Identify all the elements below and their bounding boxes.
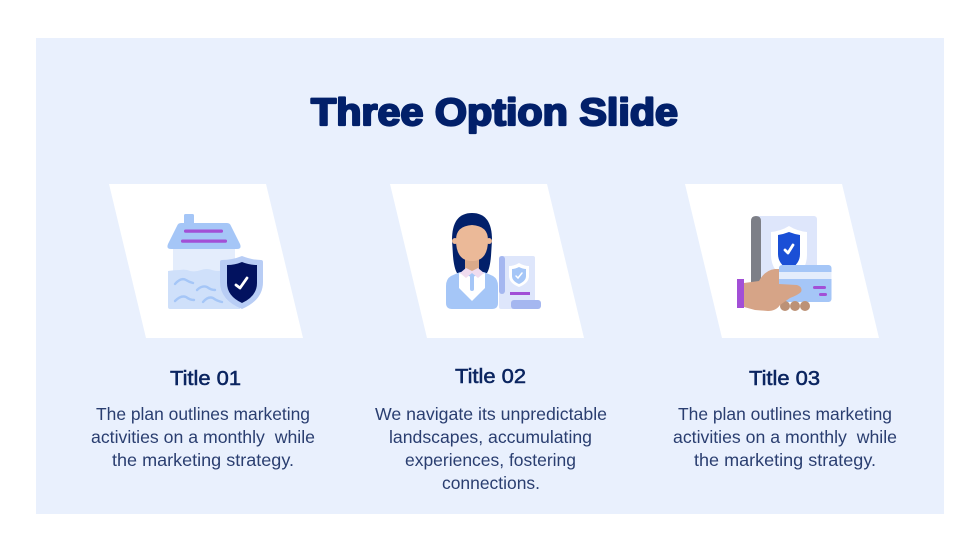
text block: option 1 description: the marketing strategy. — [112, 450, 294, 470]
title: Three Option Slide — [311, 92, 678, 134]
card 1 background — [109, 184, 303, 338]
text block: option 3 description: activities on a monthly while — [673, 427, 897, 447]
card 2 background — [390, 184, 584, 338]
text block: option 3 description: the marketing strategy. — [694, 450, 876, 470]
card 3 background — [685, 184, 879, 338]
text block: option 3 description — [673, 404, 897, 470]
heading: Title 03: Title 03 — [749, 367, 820, 390]
text block: option 2 description: landscapes, accumulating — [389, 427, 592, 447]
text block: option 1 description: activities on a monthly while — [91, 427, 315, 447]
panel: option 2 — [375, 184, 607, 493]
panel: option 3 — [673, 184, 897, 470]
text block: option 2 description: experiences, fostering — [405, 450, 576, 470]
text block: option 2 description: connections. — [442, 473, 540, 493]
text block: option 1 description: The plan outlines marketing — [96, 404, 310, 424]
icon: woman with insurance document — [446, 213, 541, 309]
text block: option 2 description: We navigate its unpredictable — [375, 404, 607, 424]
heading: Title 01: Title 01 — [170, 367, 241, 390]
panel: option 1 — [91, 184, 315, 470]
icon: hand holding credit card and insurance book — [737, 216, 832, 311]
icon: house with flood water and shield — [167, 214, 263, 309]
text block: option 2 description — [375, 404, 607, 493]
heading: Title 02: Title 02 — [455, 365, 526, 388]
text block: option 1 description — [91, 404, 315, 470]
text block: option 3 description: The plan outlines marketing — [678, 404, 892, 424]
